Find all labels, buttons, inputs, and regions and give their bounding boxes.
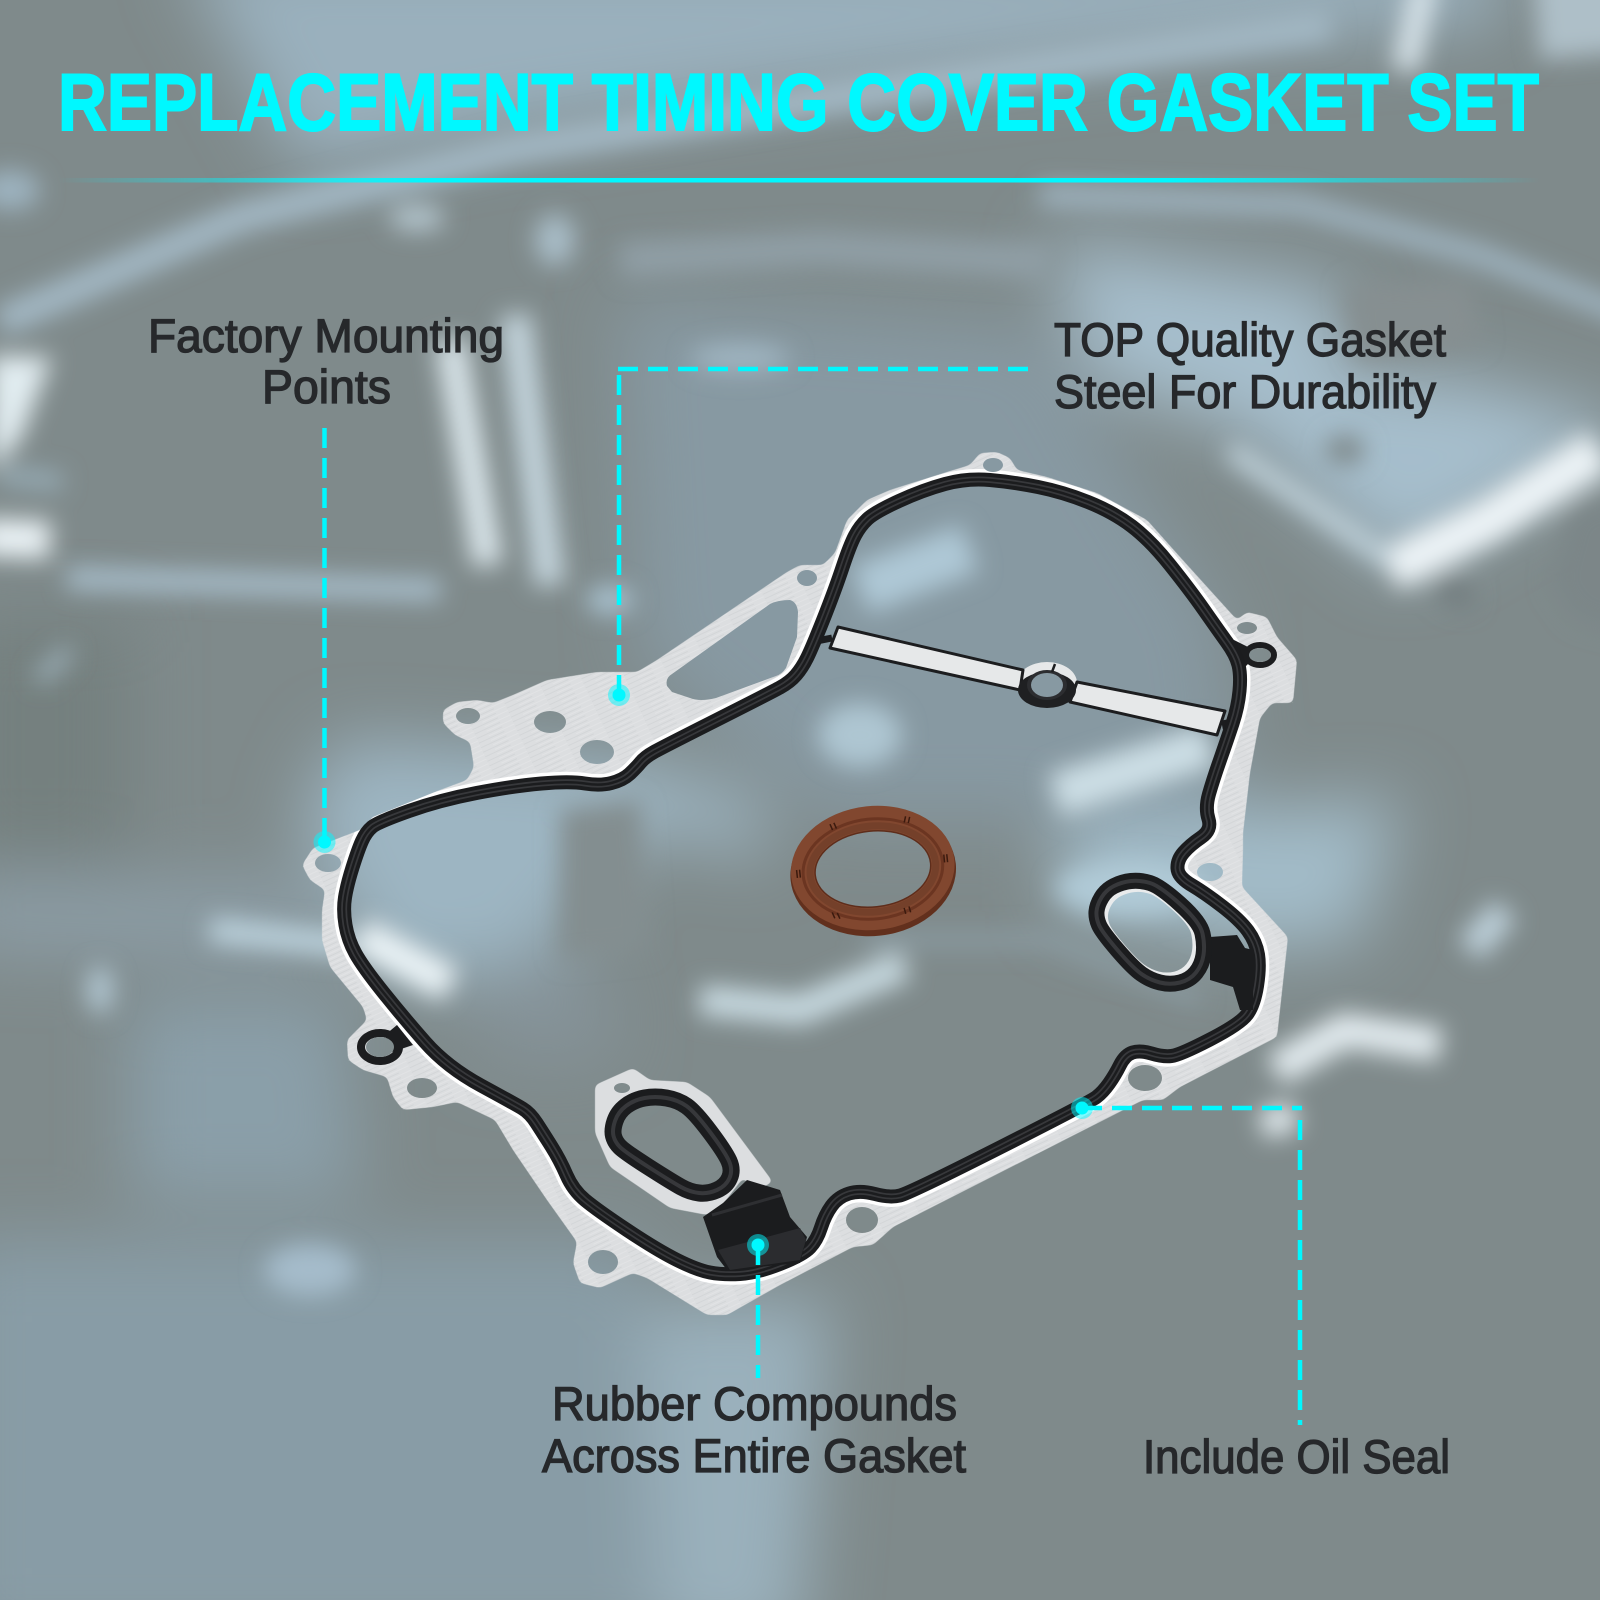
oil seal [784,798,962,944]
timing cover gasket [290,440,1310,1330]
label: top quality gasket steel: TOP Quality Gasket [1054,313,1446,366]
title divider [58,178,1540,182]
label: factory mounting points [148,309,504,413]
label: top quality gasket steel [1054,313,1446,418]
label: include oil seal: Include Oil Seal [1143,1430,1450,1483]
label: rubber compounds: Rubber Compounds [552,1377,957,1430]
callout: factory mounting points [314,428,336,853]
label: factory mounting points: Factory Mounting [148,309,504,362]
gasket set [290,440,1310,1330]
label: rubber compounds [542,1377,966,1482]
upper port seal [1096,881,1253,1010]
label: top quality gasket steel: Steel For Durability [1054,365,1436,418]
label: factory mounting points: Points [262,360,391,413]
label: rubber compounds: Across Entire Gasket [542,1429,966,1482]
steel plate [302,452,1297,1315]
cross bar [812,627,1238,735]
callout: oil seal [1071,1097,1302,1425]
callout: steel plate [608,369,1028,706]
lower port seal [595,1068,807,1270]
brushed steel texture and edge highlight [290,440,1310,1330]
callout: rubber compounds [747,1234,769,1378]
mounting rings [361,638,1274,1061]
main rubber seal [344,480,1259,1274]
